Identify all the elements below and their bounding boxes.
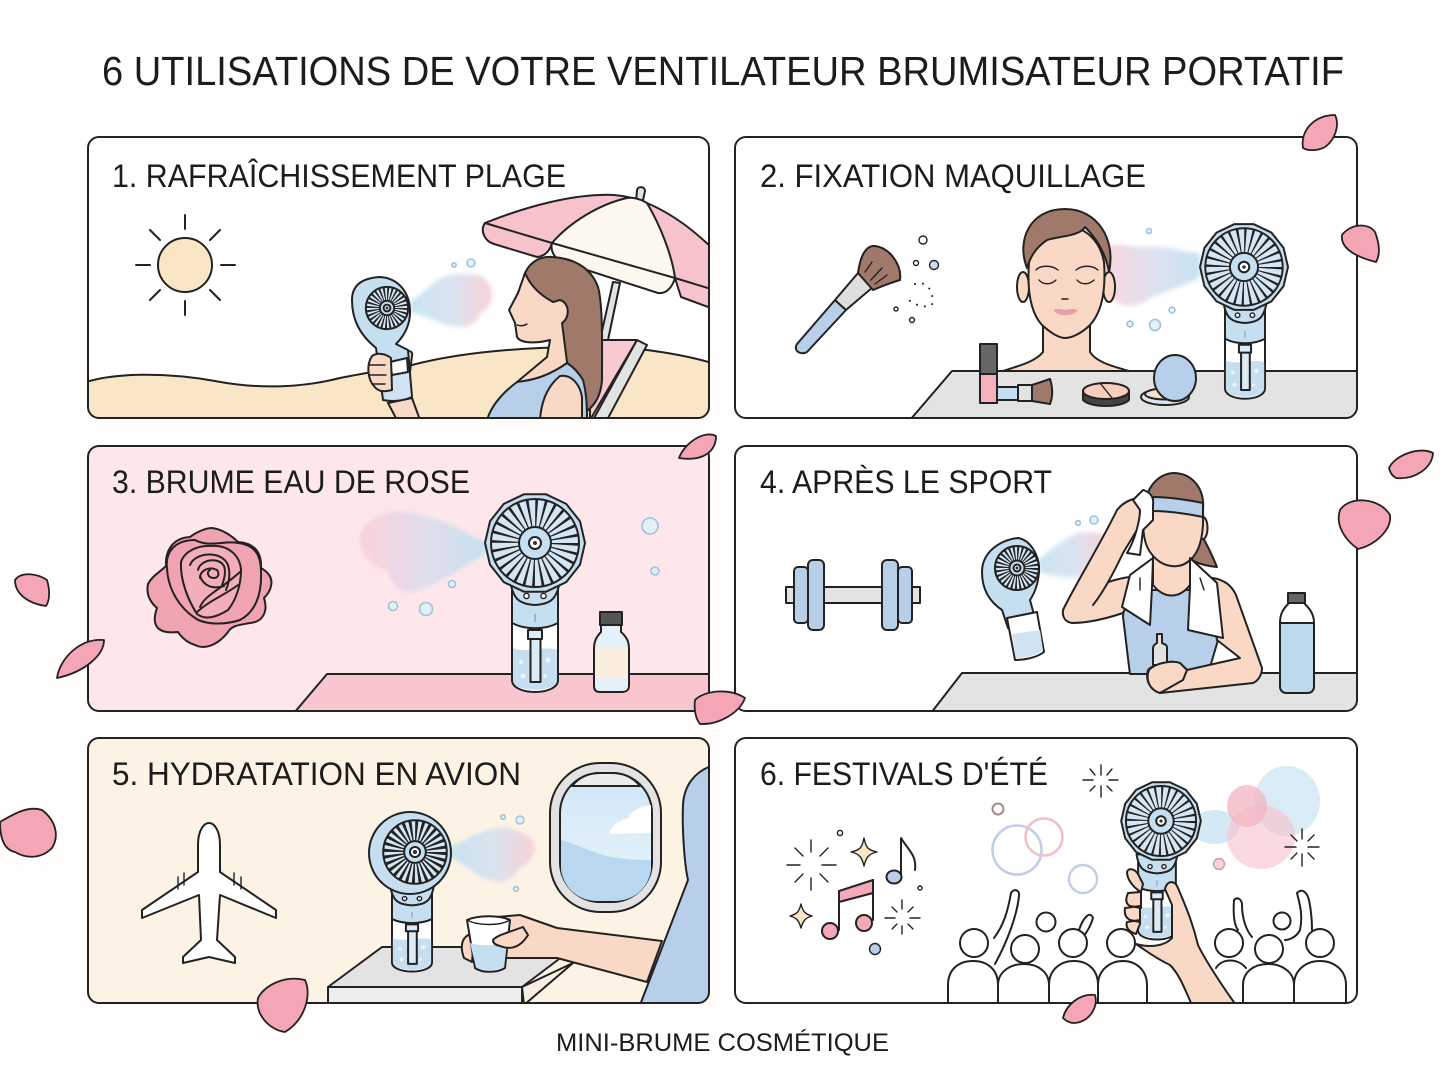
woman [487, 257, 602, 420]
standing fan [485, 494, 585, 692]
raised hand with fan [1121, 782, 1236, 1005]
mist bubbles [1146, 228, 1152, 234]
seat [640, 766, 711, 1005]
footer brand: MINI-BRUME COSMÉTIQUE [556, 1028, 889, 1057]
beach sand [86, 347, 712, 420]
festival bubbles [992, 804, 1224, 893]
standing fan [369, 812, 451, 972]
standing fan [1200, 224, 1288, 399]
cup [462, 916, 528, 972]
lipstick [980, 344, 997, 374]
panel: 3 rose water mist [88, 446, 712, 713]
essential oil bottle [594, 612, 629, 692]
bubbles [516, 816, 524, 824]
mist [1100, 245, 1200, 306]
window [550, 763, 661, 912]
mist [1038, 532, 1108, 578]
bubbles [642, 518, 658, 534]
bubbles [1090, 516, 1098, 524]
crowd [948, 890, 1346, 1005]
sparkle bursts [1083, 765, 1319, 866]
panel: 2 makeup setting [735, 137, 1360, 420]
bubbles [467, 259, 475, 267]
blush palette [1083, 383, 1129, 406]
compact mirror [1141, 355, 1196, 405]
table [931, 673, 1360, 713]
arm [490, 915, 662, 982]
panel: 5 airplane hydration [88, 738, 711, 1005]
tilted fan [982, 538, 1044, 660]
title: 6 UTILISATIONS DE VOTRE VENTILATEUR BRUMISATEUR PORTATIF [102, 48, 1344, 94]
woman portrait [1003, 209, 1129, 371]
heading: 5. HYDRATATION EN AVION [112, 756, 521, 792]
mist [410, 274, 492, 327]
icon: dumbbell [786, 560, 920, 630]
icon: airplane [142, 823, 276, 963]
heading: 2. FIXATION MAQUILLAGE [760, 158, 1146, 194]
mist clouds [1191, 766, 1320, 869]
mist [450, 827, 535, 882]
icon: rose [147, 528, 271, 647]
music icons [787, 830, 922, 954]
woman [1063, 473, 1262, 693]
tray table [328, 947, 575, 1005]
hand and fan [352, 277, 420, 420]
panel: 4 after sport [735, 446, 1360, 713]
makeup brush [796, 246, 900, 353]
table [294, 674, 712, 713]
heading: 4. APRÈS LE SPORT [760, 464, 1052, 500]
panel: 6 summer festivals [735, 738, 1357, 1005]
small brush [997, 379, 1052, 404]
mist [360, 512, 486, 592]
heading: 3. BRUME EAU DE ROSE [112, 464, 470, 500]
heading: 1. RAFRAÎCHISSEMENT PLAGE [112, 158, 566, 194]
vanity table [910, 371, 1360, 420]
panel: 1 beach cooling [86, 137, 712, 420]
powder particles [894, 236, 938, 322]
beach umbrella [483, 187, 711, 340]
water bottle [1280, 593, 1314, 693]
icon: sun [136, 215, 235, 315]
heading: 6. FESTIVALS D'ÉTÉ [760, 756, 1048, 792]
beach chair [591, 339, 638, 417]
